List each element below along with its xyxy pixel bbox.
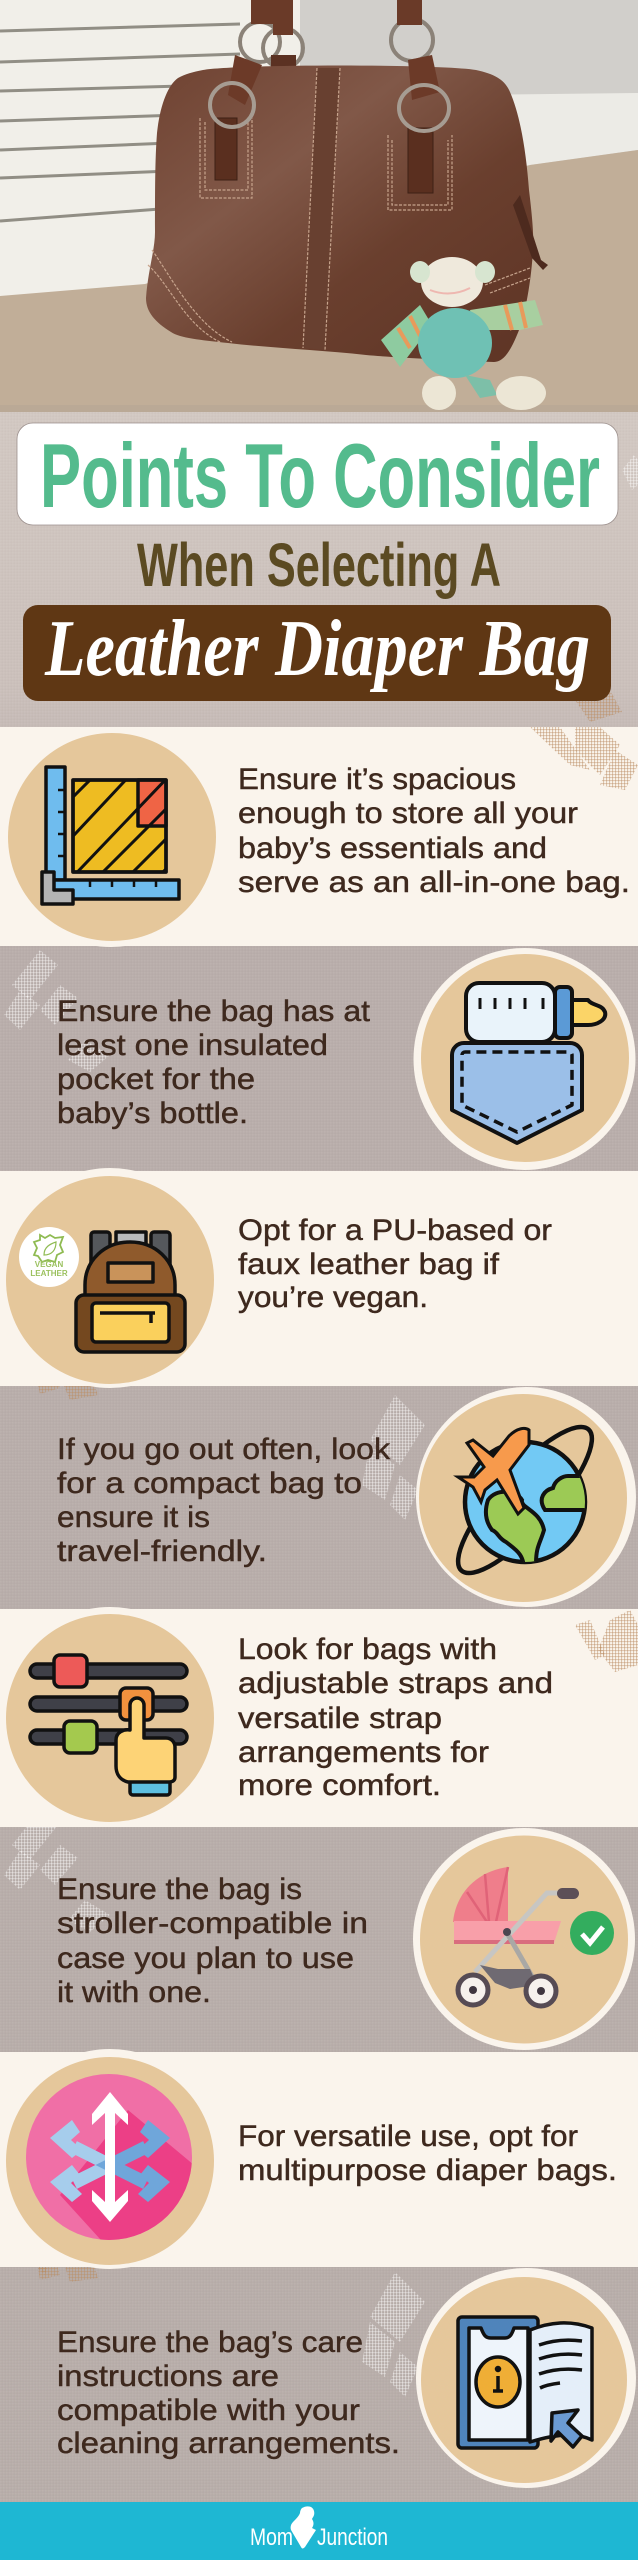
panel: adjustable straps: more comfort. (238, 1769, 441, 1802)
point: care instructions: instructions are (57, 2360, 279, 2393)
point: stroller compatible: it with one. (57, 1976, 211, 2009)
footer with MomJunction logo: Junction (317, 2524, 388, 2551)
panel: vegan: faux leather bag if (238, 1248, 500, 1281)
panel: vegan: you’re vegan. (238, 1281, 428, 1314)
point: stroller compatible (57, 1828, 635, 2050)
panel: spacious: Ensure it’s spacious (238, 763, 516, 796)
point: stroller compatible: Ensure the bag is (57, 1873, 302, 1906)
panel: spacious: baby’s essentials and (238, 832, 547, 865)
panel: adjustable straps: Look for bags with (238, 1633, 497, 1666)
point: care instructions: cleaning arrangements. (57, 2427, 400, 2460)
point: compact travel bag (57, 1387, 636, 1607)
point: care instructions: compatible with your (57, 2394, 360, 2427)
point: compact travel bag: travel-friendly. (57, 1535, 267, 1568)
point: insulated pocket: pocket for the (57, 1063, 255, 1096)
panel: spacious: enough to store all your (238, 797, 578, 830)
icon: multidirectional arrows (26, 2074, 192, 2240)
decorative cross-hatch (4, 455, 638, 2397)
point: compact travel bag: for a compact bag to (57, 1467, 362, 1500)
point: insulated pocket: Ensure the bag has at (57, 995, 370, 1028)
panel: multipurpose (0, 2049, 638, 2269)
footer with MomJunction logo (0, 2502, 638, 2560)
point: care instructions: Ensure the bag’s care (57, 2326, 363, 2359)
point: stroller compatible: case you plan to use (57, 1942, 354, 1975)
icon: logo figure (291, 2506, 316, 2548)
panel: spacious: serve as an all-in-one bag. (238, 866, 630, 899)
icon: device and book (458, 2317, 592, 2448)
panel: multipurpose: For versatile use, opt for (238, 2120, 578, 2153)
point: insulated pocket: least one insulated (57, 1029, 328, 1062)
icon: ruler and fabric (42, 767, 180, 904)
panel: multipurpose: multipurpose diaper bags. (238, 2154, 617, 2187)
icon: globe and plane (453, 1424, 594, 1576)
footer with MomJunction logo: Mom (250, 2524, 293, 2551)
icon: vegan leather badge: LEATHER (30, 1269, 68, 1278)
hero photo: leather bag and toy monkey (0, 0, 638, 412)
icon: backpack (76, 1232, 185, 1352)
point: compact travel bag: ensure it is (57, 1501, 210, 1534)
back handles (240, 19, 433, 68)
panel: adjustable straps: arrangements for (238, 1736, 489, 1769)
point: insulated pocket: baby’s bottle. (57, 1097, 248, 1130)
point: insulated pocket (57, 948, 636, 1170)
panel: adjustable straps (0, 1607, 638, 1827)
monkey toy (381, 305, 432, 367)
icon: vegan leather badge (19, 1227, 79, 1287)
bag body (146, 66, 533, 362)
panel: adjustable straps: adjustable straps and (238, 1667, 553, 1700)
icon: bottle in pocket (452, 983, 605, 1143)
panel: spacious (0, 727, 638, 947)
icon: stroller with check (453, 1867, 614, 2006)
point: care instructions (57, 2268, 636, 2488)
icon: vegan leather badge: VEGAN (35, 1260, 63, 1269)
icon: sliders and hand (30, 1655, 187, 1795)
point: stroller compatible: stroller-compatible in (57, 1907, 368, 1940)
point: compact travel bag: If you go out often, look (57, 1433, 390, 1466)
subtitle: When Selecting A: When Selecting A (137, 531, 501, 599)
panel: adjustable straps: versatile strap (238, 1702, 442, 1735)
panel: vegan (0, 1168, 638, 1388)
panel: vegan: Opt for a PU-based or (238, 1214, 552, 1247)
